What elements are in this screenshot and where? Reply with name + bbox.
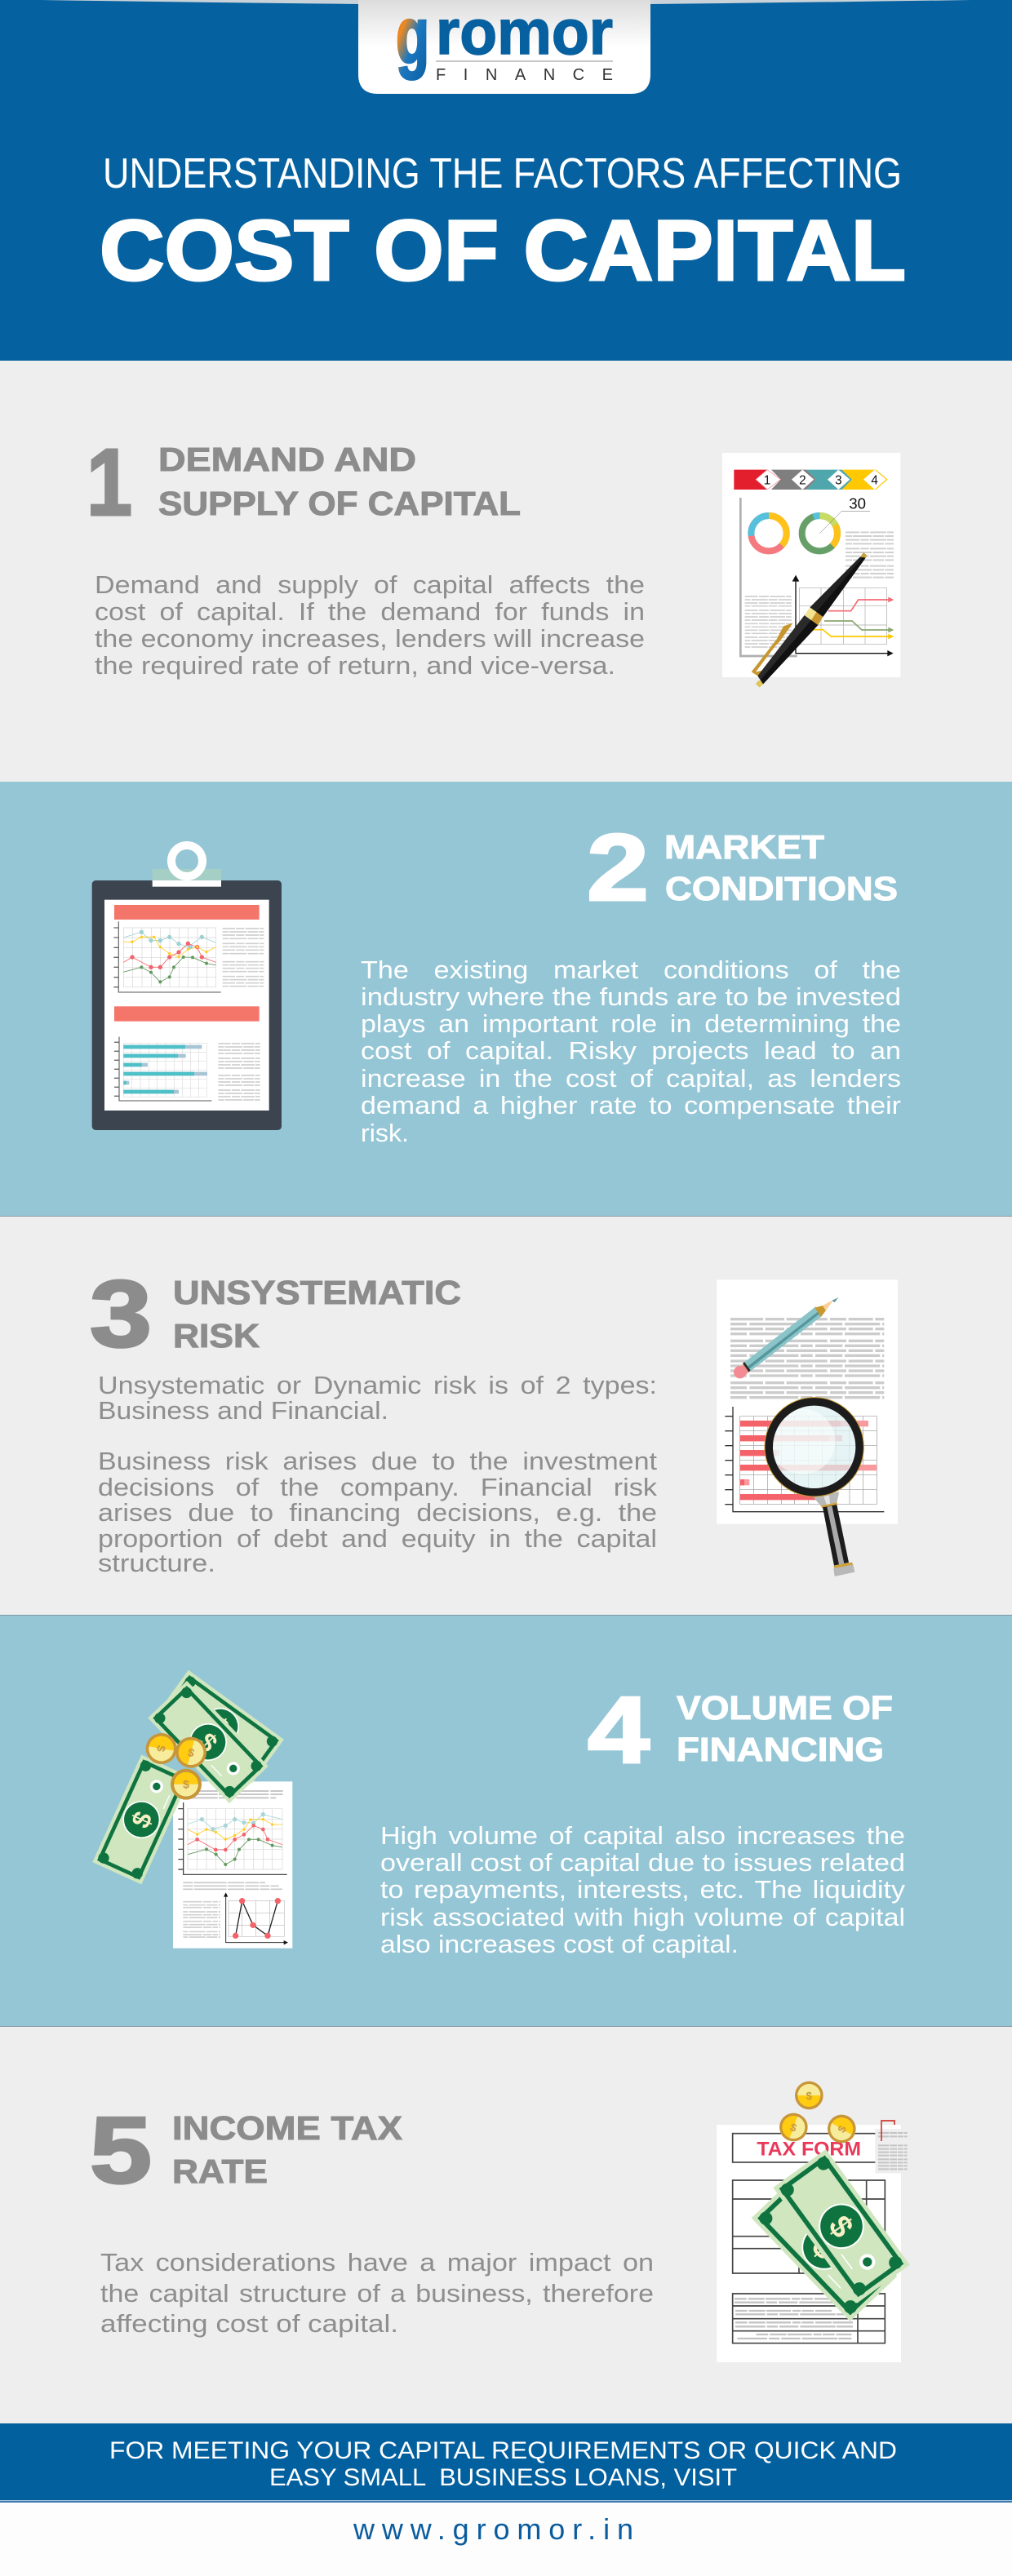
body text 4: also increases cost of capital.	[380, 1930, 739, 1958]
magnifier	[765, 1398, 863, 1576]
heading 5: INCOME TAX	[172, 2109, 402, 2147]
side note	[875, 2121, 908, 2173]
panel: volume of financing	[0, 1615, 1012, 2026]
heading 4: FINANCING	[677, 1731, 884, 1768]
banknote: front	[773, 2149, 910, 2303]
donut charts	[751, 516, 837, 551]
body text 4: High volume of capital also increases the	[380, 1821, 905, 1850]
form title: TAX FORM	[757, 2139, 861, 2161]
banknote: left: $	[126, 1807, 158, 1833]
heading 3: UNSYSTEMATIC	[173, 1274, 461, 1311]
heading 2: MARKET	[664, 828, 824, 866]
number 5: 5	[90, 2097, 152, 2203]
body text 1: the economy increases, lenders will increase	[95, 624, 645, 653]
line chart	[792, 575, 894, 656]
panel: demand and supply of capital	[0, 361, 1012, 782]
pencil	[734, 1297, 838, 1378]
heading 4	[677, 1689, 893, 1768]
bar chart	[725, 1407, 884, 1512]
logo subtitle: FINANCE	[436, 66, 613, 84]
number 4: 4	[588, 1677, 650, 1783]
website address: www.gromor.in	[353, 2512, 633, 2546]
body text 2: industry where the funds are to be invested	[361, 982, 901, 1011]
number 1: 1	[87, 429, 132, 535]
heading 3: RISK	[173, 1317, 260, 1355]
coins: $	[154, 1745, 168, 1753]
body text 3: Unsystematic or Dynamic risk is of 2 types:	[98, 1371, 657, 1399]
body text 2: risk.	[361, 1119, 409, 1147]
body text 3	[98, 1371, 658, 1577]
call to action text: FOR MEETING YOUR CAPITAL REQUIREMENTS OR QUICK AND	[109, 2437, 897, 2464]
body text 3: Business and Financial.	[98, 1396, 388, 1425]
panel: unsystematic risk	[0, 1216, 1012, 1615]
coins: $	[788, 2121, 799, 2135]
heading 3	[173, 1274, 461, 1355]
body text 2: plays an important role in determining the	[361, 1009, 901, 1038]
illustration: tax form with money	[717, 2082, 910, 2362]
banknote: back: $	[805, 2229, 842, 2266]
heading 1	[158, 441, 521, 522]
coins: $	[806, 2090, 813, 2102]
body text 3: arises due to financing decisions, e.g. the	[98, 1498, 657, 1527]
banknote: front: $	[193, 1727, 224, 1758]
banknote: front: $	[821, 2210, 860, 2244]
illustration: report with pen	[722, 453, 900, 688]
body text 2	[361, 955, 901, 1147]
number 2: 2	[587, 814, 649, 920]
body text 4: to repayments, interests, etc. The liquidity	[380, 1875, 906, 1904]
coins: $	[186, 1745, 196, 1759]
banknote: back	[752, 2173, 897, 2321]
heading 4: VOLUME OF	[677, 1689, 893, 1727]
body text 4: risk associated with high volume of capital	[380, 1903, 905, 1931]
title line 1: UNDERSTANDING THE FACTORS AFFECTING	[103, 150, 902, 197]
heading 5: RATE	[172, 2153, 268, 2190]
body text 1	[95, 570, 645, 680]
bar chart	[114, 1037, 211, 1101]
body text 5: the capital structure of a business, therefore	[100, 2279, 654, 2308]
coins	[144, 1731, 210, 1800]
banknote: back: $	[206, 1710, 235, 1743]
panel: website	[0, 2503, 1012, 2576]
banknote: back	[157, 1670, 284, 1783]
coins: $	[835, 2123, 849, 2135]
heading 2	[664, 828, 898, 907]
call to action text: EASY SMALL BUSINESS LOANS, VISIT	[269, 2464, 737, 2491]
panel: header	[0, 0, 1012, 361]
body text 2: increase in the cost of capital, as lenders	[361, 1064, 901, 1093]
heading 2: CONDITIONS	[665, 870, 898, 907]
call to action text	[109, 2437, 897, 2491]
body text 3: decisions of the company. Financial risk	[98, 1473, 658, 1501]
title line 2: COST OF CAPITAL	[100, 203, 906, 299]
coins	[775, 2082, 861, 2148]
body text 2: cost of capital. Risky projects lead to an	[361, 1036, 901, 1065]
body text 3: proportion of debt and equity in the capital	[98, 1524, 657, 1553]
coins: $	[183, 1778, 189, 1791]
heading 1: SUPPLY OF CAPITAL	[158, 485, 521, 522]
heading 1: DEMAND AND	[158, 441, 416, 478]
body text 5	[100, 2248, 654, 2338]
line chart	[113, 921, 221, 992]
panel: market conditions	[0, 782, 1012, 1216]
heading 5	[172, 2109, 402, 2190]
body text 5: affecting cost of capital.	[100, 2309, 398, 2338]
body text 4	[380, 1821, 906, 1958]
illustration: magnifier over report	[717, 1279, 898, 1576]
numbered ribbon: 4	[871, 473, 878, 487]
body text 4: overall cost of capital due to issues related	[380, 1848, 905, 1877]
pen	[752, 552, 867, 688]
banknote: left	[92, 1754, 190, 1885]
callout value: 30	[849, 494, 866, 512]
body text 2: The existing market conditions of the	[361, 955, 901, 984]
numbered ribbon: 2	[799, 473, 806, 487]
body text 1: Demand and supply of capital affects the	[95, 570, 645, 599]
body text 1: cost of capital. If the demand for funds in	[95, 597, 645, 626]
panel: footer call to action	[0, 2423, 1012, 2503]
numbered ribbon: 3	[835, 473, 842, 487]
number 3: 3	[90, 1261, 152, 1367]
body text 1: the required rate of return, and vice-versa.	[95, 651, 615, 680]
panel: income tax rate	[0, 2026, 1012, 2423]
body text 5: Tax considerations have a major impact on	[100, 2248, 654, 2277]
numbered ribbon: 1	[764, 473, 770, 487]
logo tab	[358, 0, 650, 94]
illustration: clipboard	[92, 845, 282, 1130]
body text 3: structure.	[98, 1549, 215, 1577]
body text 3: Business risk arises due to the investment	[98, 1447, 657, 1475]
body text 2: demand a higher rate to compensate their	[361, 1091, 901, 1120]
banknote: front	[148, 1681, 269, 1803]
illustration: money and charts	[92, 1670, 292, 1949]
report page	[173, 1781, 292, 1949]
numbered ribbon	[734, 470, 888, 490]
